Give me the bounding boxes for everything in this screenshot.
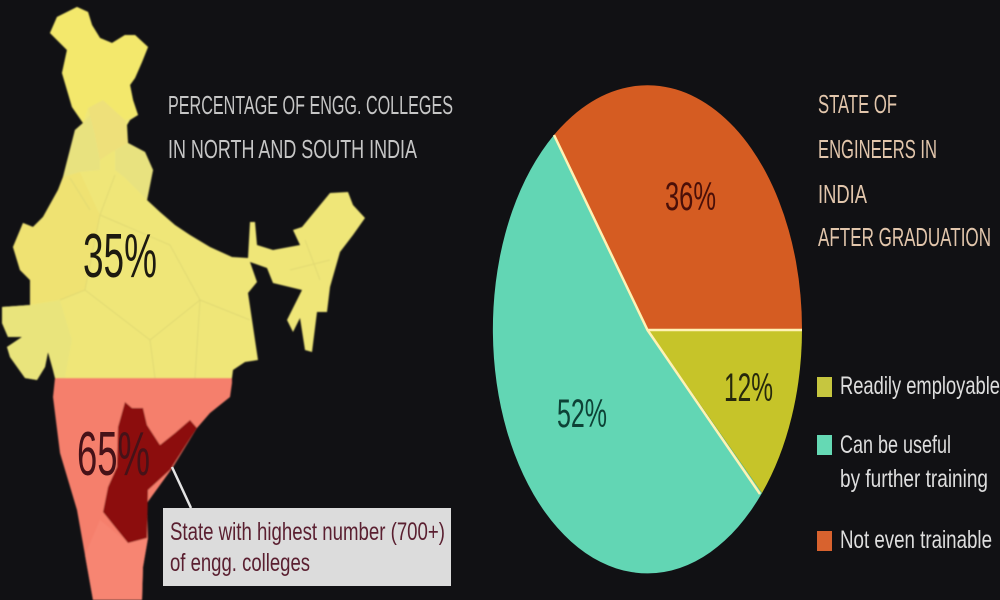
map of India: [2, 7, 365, 600]
map heading: PERCENTAGE OF ENGG. COLLEGES: [168, 90, 453, 120]
highlighted state: [103, 402, 197, 543]
south India region: [53, 378, 232, 600]
pie heading: ENGINEERS IN: [818, 134, 937, 164]
southern tip tone: [85, 520, 148, 600]
callout: State with highest number (700+): [170, 518, 445, 546]
pie heading: INDIA: [818, 179, 867, 209]
pie label: 36%: 36%: [665, 175, 716, 219]
north India region: [2, 7, 365, 380]
legend: can be useful: Can be useful: [840, 431, 951, 459]
pie heading: [818, 89, 991, 252]
slice: can be useful 52%: [493, 135, 762, 573]
Rajasthan tone: [13, 172, 100, 305]
pie heading: STATE OF: [818, 89, 897, 119]
pie label: 52%: 52%: [557, 392, 607, 436]
callout: of engg. colleges: [170, 549, 310, 577]
percentage: south: 65%: [77, 420, 150, 489]
slice: not even trainable 36%: [554, 85, 802, 329]
callout leader line: [172, 467, 191, 508]
map heading: IN NORTH AND SOUTH INDIA: [168, 134, 417, 164]
Gujarat tone: [2, 300, 72, 380]
percentage: north: 35%: [83, 222, 157, 291]
map heading: [168, 90, 453, 164]
Punjab and Uttar Pradesh tones: [63, 115, 100, 177]
slice: readily employable 12%: [648, 329, 802, 493]
callout: [163, 508, 451, 586]
Jammu and Himachal tone: [50, 7, 148, 123]
slice separators: [554, 135, 802, 494]
pie chart: [493, 85, 802, 573]
legend: [817, 372, 1000, 554]
legend: can be useful: [817, 431, 988, 493]
pie label: 12%: 12%: [724, 366, 773, 410]
